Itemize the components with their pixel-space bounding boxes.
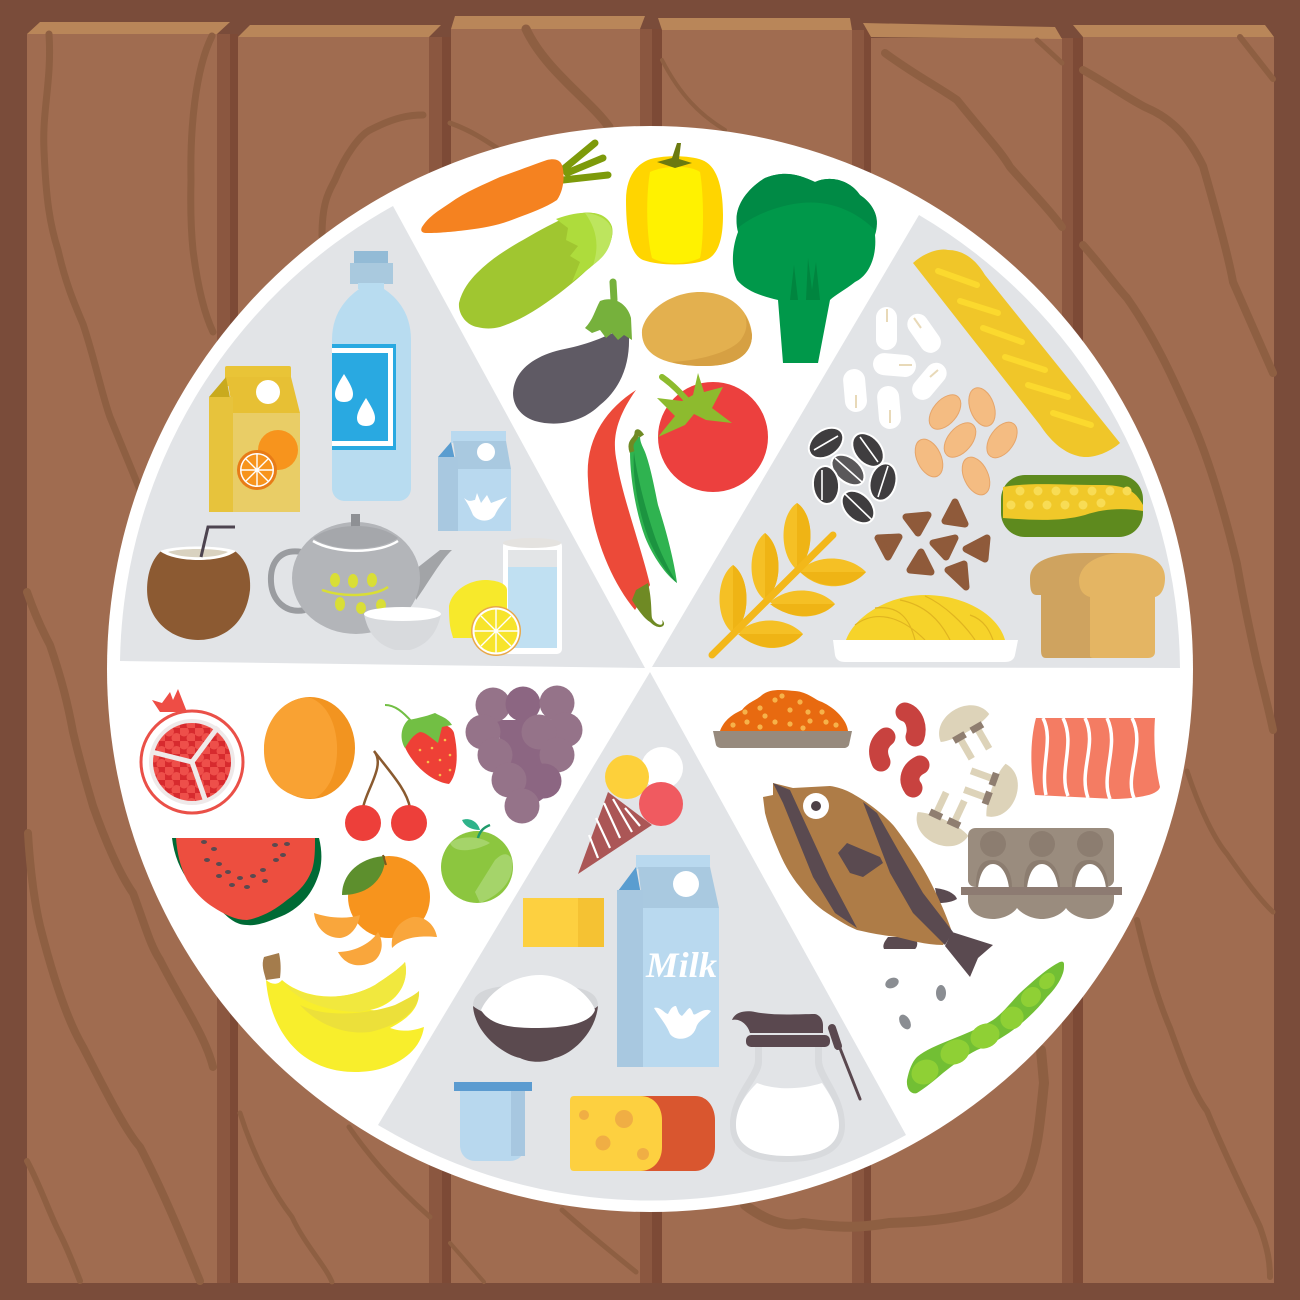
panel: fruits (141, 686, 582, 1072)
icon: mushrooms (909, 696, 1025, 855)
icon: coconut (147, 527, 250, 640)
icon: eggplant (513, 282, 632, 424)
icon: noodles on a plate (833, 595, 1018, 662)
icon: bacon (1031, 718, 1160, 799)
sector background: drinks (120, 206, 645, 668)
icon: peach (264, 697, 355, 799)
icon: cucumber (459, 213, 612, 328)
icon: grey seeds (884, 976, 946, 1031)
icon: rice bowl (473, 975, 598, 1062)
icon: yogurt cup (454, 1082, 532, 1161)
icon: milk carton (617, 855, 719, 1067)
icon: green apple (441, 819, 513, 903)
icon: small milk carton (438, 431, 511, 531)
icon: mandarin (314, 855, 437, 965)
icon: caviar dish (713, 690, 852, 748)
icon: water bottle (332, 251, 411, 501)
icon: coffee pot with milk (730, 1011, 860, 1162)
panel: water and drinks (120, 206, 645, 668)
white plate (107, 126, 1193, 1212)
icon: tea cup (364, 607, 441, 650)
icon: kidney beans (879, 712, 920, 788)
icon: cherries (345, 751, 427, 841)
panel: dairy (378, 672, 906, 1201)
icon: fish (763, 783, 993, 977)
icon: green chili (630, 432, 677, 583)
icon: baguette (913, 250, 1120, 457)
icon: strawberry (385, 705, 457, 784)
icon: white rice grains (842, 307, 951, 430)
icon: pea pod (907, 962, 1064, 1093)
icon: ice cream (578, 747, 683, 874)
icon: cheese (570, 1096, 715, 1171)
icon: egg carton (961, 828, 1122, 919)
icon: watermelon (172, 838, 321, 925)
sector background: grains (652, 215, 1180, 668)
icon: red chili (588, 390, 664, 627)
icon: broccoli (733, 174, 877, 363)
icon: grapes (466, 686, 582, 824)
icon: glass of water (503, 538, 562, 654)
icon: yellow bell pepper (626, 143, 723, 264)
panel: vegetables (421, 143, 877, 627)
icon: bananas (263, 953, 424, 1072)
text: Milk: Milk (645, 945, 717, 985)
sector background: dairy (378, 672, 906, 1201)
panel: proteins (713, 690, 1160, 1093)
icon: corn (1001, 475, 1143, 537)
icon: butter (523, 898, 604, 947)
icon: wheat ear (712, 503, 866, 655)
icon: pomegranate (141, 689, 243, 813)
icon: lemon (449, 580, 521, 656)
icon: potato (642, 292, 752, 366)
icon: wheat grains (910, 384, 1023, 499)
icon: sunflower seeds (803, 421, 900, 530)
icon: juice carton (209, 366, 300, 512)
icon: bread loaf (1030, 553, 1165, 658)
icon: carrot (421, 143, 608, 233)
icon: buckwheat (878, 502, 987, 587)
panel: grains (652, 215, 1180, 668)
icon: tomato (657, 373, 768, 492)
icon: teapot (271, 514, 452, 634)
